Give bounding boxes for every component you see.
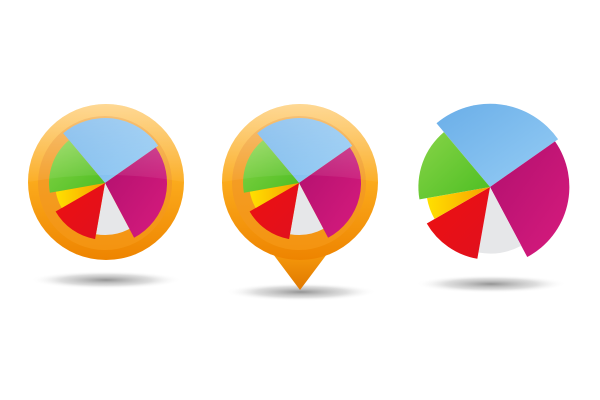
icon: standalone pie chart <box>418 104 569 259</box>
icon: pie in orange ring <box>28 104 184 260</box>
shadow: right icon <box>415 275 567 293</box>
shadow: left icon <box>30 271 182 289</box>
shadow: middle icon <box>225 283 377 301</box>
icon: pie in orange map pin <box>222 104 378 290</box>
